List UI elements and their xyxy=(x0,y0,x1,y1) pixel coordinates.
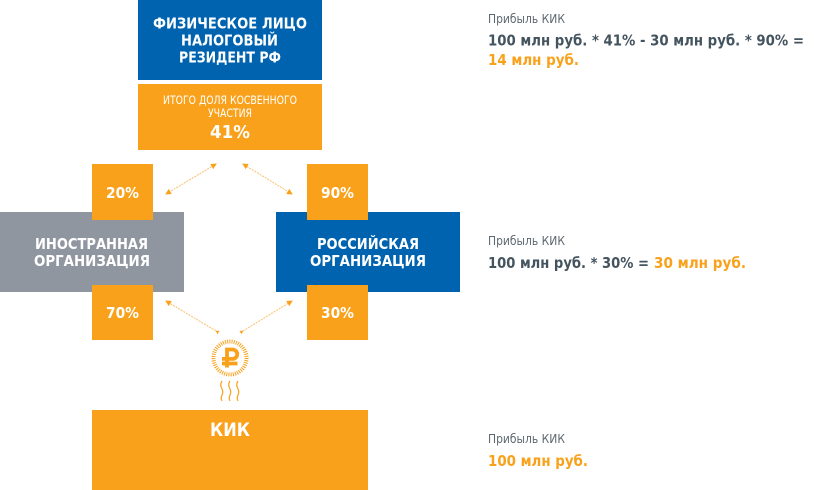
text block: CFC profit: 100 млн руб. xyxy=(488,452,588,470)
text block: CFC profit xyxy=(488,432,588,470)
text block: russian organisation profit: Прибыль КИК xyxy=(488,234,565,248)
panel: individual tax resident: РЕЗИДЕНТ РФ xyxy=(179,48,281,66)
panel: individual tax resident: НАЛОГОВЫЙ xyxy=(181,30,278,50)
panel: individual tax resident xyxy=(138,0,322,80)
text block: russian organisation profit: 100 млн руб. * 30% = xyxy=(488,254,649,272)
icon: rouble coin with heat lines xyxy=(214,342,246,401)
share: 90%: 90% xyxy=(321,184,354,202)
text block: CFC profit: Прибыль КИК xyxy=(488,432,565,446)
arrow: CFC to 70% xyxy=(166,301,216,331)
panel: total indirect share: 41% xyxy=(210,122,250,143)
panel: russian organisation xyxy=(276,212,460,292)
share: 70%: 70% xyxy=(106,304,139,322)
panel: CFC xyxy=(92,410,368,490)
text block: individual profit: 14 млн руб. xyxy=(488,51,579,69)
panel: total indirect share xyxy=(138,84,322,150)
share: 90% xyxy=(307,164,368,220)
share: 20% xyxy=(92,164,153,220)
arrow: CFC to 30% xyxy=(243,301,292,331)
arrow: 20% to total xyxy=(166,164,216,194)
panel: foreign organisation: ОРГАНИЗАЦИЯ xyxy=(34,252,150,270)
text block: individual profit: Прибыль КИК xyxy=(488,12,565,26)
text block: individual profit xyxy=(488,12,804,69)
panel: russian organisation: ОРГАНИЗАЦИЯ xyxy=(310,252,426,270)
panel: total indirect share: УЧАСТИЯ xyxy=(208,106,252,120)
text block: russian organisation profit: 30 млн руб. xyxy=(654,254,746,272)
share: 30%: 30% xyxy=(321,304,354,322)
text block: russian organisation profit xyxy=(488,234,746,272)
panel: russian organisation: РОССИЙСКАЯ xyxy=(317,234,419,253)
share: 70% xyxy=(92,285,153,340)
panel: foreign organisation: ИНОСТРАННАЯ xyxy=(35,235,148,253)
panel: total indirect share: ИТОГО ДОЛЯ КОСВЕННОГО xyxy=(163,93,297,107)
panel: CFC: КИК xyxy=(210,419,250,441)
panel: individual tax resident: ФИЗИЧЕСКОЕ ЛИЦО xyxy=(153,14,307,32)
share: 30% xyxy=(307,285,368,340)
arrow: 90% to total xyxy=(243,164,292,194)
share: 20%: 20% xyxy=(106,184,139,202)
panel: foreign organisation xyxy=(0,212,184,292)
